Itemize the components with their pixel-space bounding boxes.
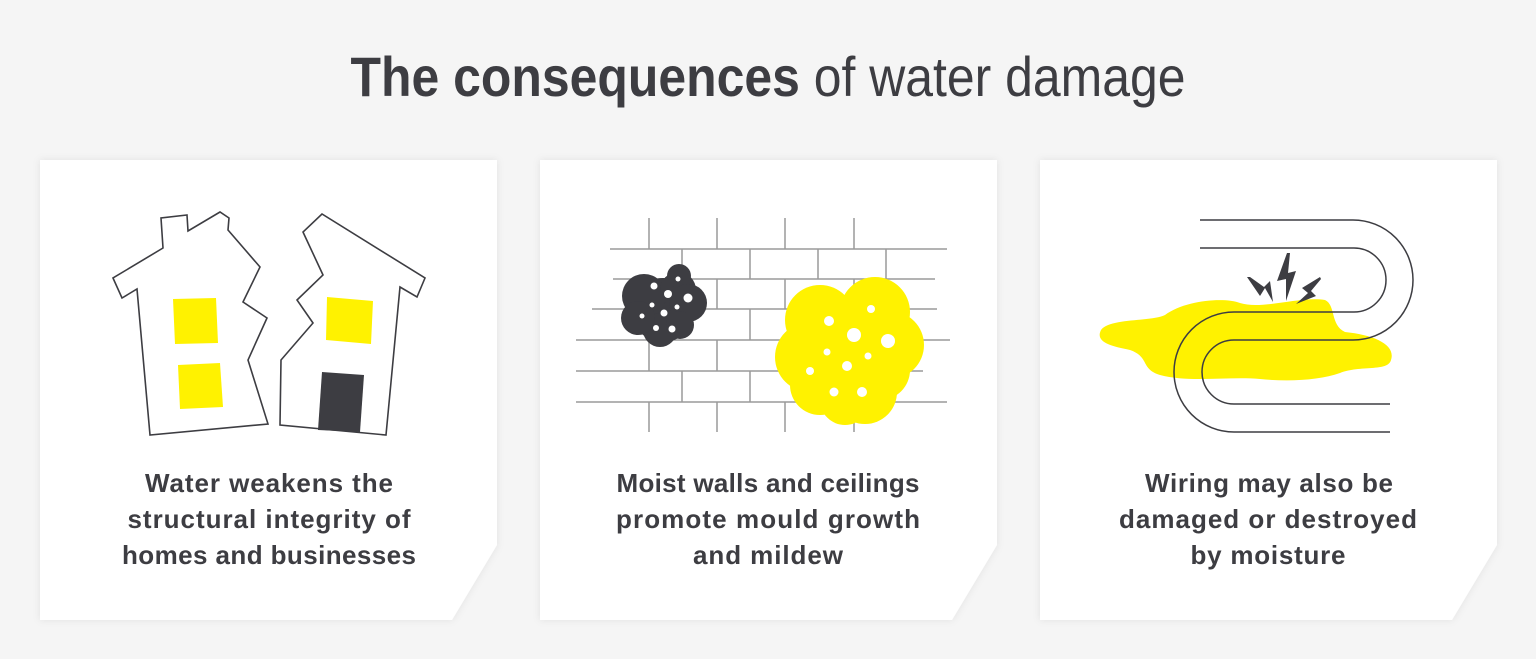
text: mould: promote mould growth bbox=[616, 504, 920, 534]
text: structural: Water weakens the bbox=[145, 468, 393, 498]
text: wiring: damaged or destroyed bbox=[1119, 504, 1417, 534]
text: structural: structural integrity of bbox=[128, 504, 411, 534]
panel: mould bbox=[540, 160, 997, 620]
icon: broken house bbox=[113, 212, 425, 435]
text: mould: Moist walls and ceilings bbox=[616, 468, 920, 498]
text: wiring: Wiring may also be bbox=[1145, 468, 1393, 498]
icon: wire in puddle bbox=[1100, 220, 1413, 432]
panel: structural integrity bbox=[40, 160, 497, 620]
text: wiring: by moisture bbox=[1190, 540, 1346, 570]
text: structural: homes and businesses bbox=[122, 540, 416, 570]
text: mould: and mildew bbox=[693, 540, 844, 570]
icon: brick wall with mould bbox=[576, 218, 950, 432]
title: The consequences of water damage bbox=[350, 45, 1186, 108]
panel: wiring bbox=[1040, 160, 1497, 620]
